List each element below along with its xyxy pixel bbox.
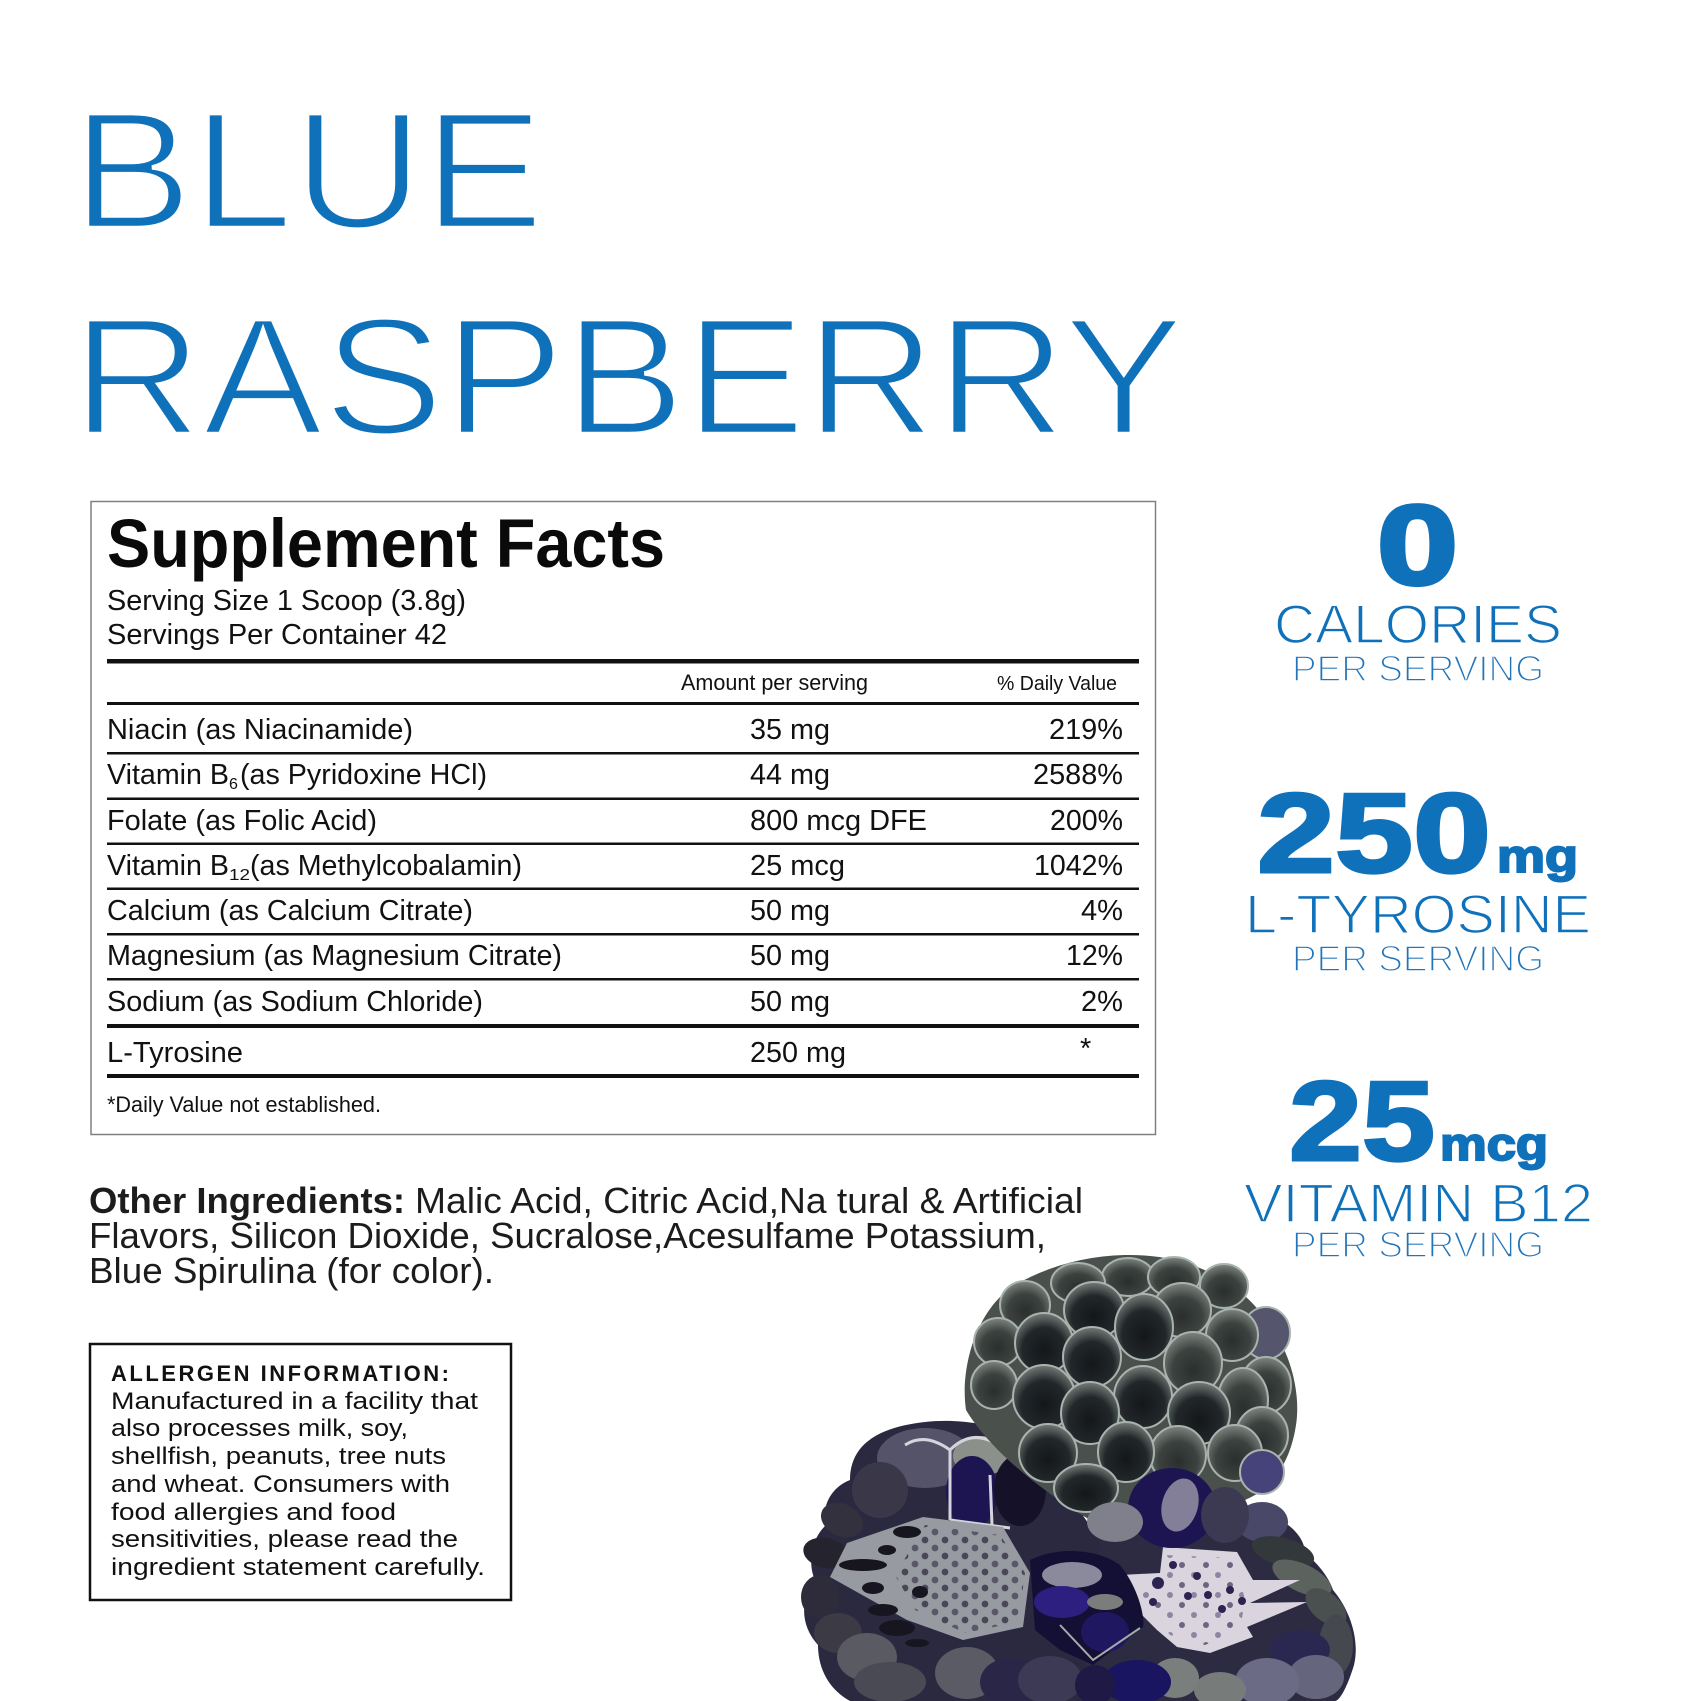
row: niacin	[107, 714, 1123, 746]
big number 25 mcg: 25	[1289, 1058, 1435, 1184]
row: vitamin b12: 25 mcg	[750, 850, 845, 882]
other ingredients: Other Ingredients:	[89, 1180, 405, 1221]
row: sodium	[107, 986, 1123, 1018]
big number 25 mcg	[1289, 1058, 1548, 1184]
serving information	[107, 585, 466, 651]
row: calcium: 4%	[1081, 895, 1123, 927]
allergen body text: food allergies and food	[111, 1499, 396, 1526]
allergen body text: and wheat. Consumers with	[111, 1471, 450, 1498]
allergen body text	[111, 1388, 485, 1581]
row: vitamin b6: 44 mg	[750, 759, 830, 791]
row: vitamin b6	[107, 759, 1123, 793]
column headers: % Daily Value	[997, 673, 1117, 695]
serving information: Serving Size 1 Scoop (3.8g)	[107, 585, 466, 617]
title: BLUE	[72, 78, 544, 264]
stat: 250 mg l-tyrosine	[1245, 770, 1591, 979]
row: calcium: Calcium (as Calcium Citrate)	[107, 895, 473, 927]
row: magnesium: 50 mg	[750, 940, 830, 972]
allergen body text: Manufactured in a facility that	[111, 1388, 478, 1415]
panel: allergen information	[90, 1344, 511, 1600]
row: vitamin b12: 12	[229, 867, 250, 884]
big number 250 mg: 250	[1257, 770, 1491, 896]
big number 0: 0	[1377, 482, 1458, 608]
overlapping purple drupelet	[1087, 1468, 1249, 1548]
column headers: Amount per serving	[681, 670, 868, 695]
illustration: blue raspberries	[800, 1255, 1356, 1701]
left cut face	[830, 1517, 1030, 1647]
row: niacin: 35 mg	[750, 714, 830, 746]
label: calories: CALORIES	[1274, 593, 1562, 655]
row: sodium: Sodium (as Sodium Chloride)	[107, 986, 483, 1018]
label: per serving: PER SERVING	[1292, 648, 1544, 689]
right berry lobes	[1103, 1502, 1353, 1701]
row: niacin: 219%	[1049, 714, 1123, 746]
row: folate: Folate (as Folic Acid)	[107, 805, 377, 837]
row: vitamin b12: Vitamin B	[107, 850, 229, 882]
other ingredients: Malic Acid, Citric Acid,Na tural & Artificial	[415, 1180, 1083, 1221]
row: l-tyrosine: *	[1080, 1033, 1091, 1065]
center dark drupelets	[1018, 1551, 1143, 1701]
row: sodium: 2%	[1081, 986, 1123, 1018]
row: folate	[107, 805, 1123, 837]
right raspberry	[1056, 1502, 1356, 1701]
left raspberry	[800, 1421, 1100, 1701]
row: vitamin b12	[107, 850, 1123, 884]
right cut face	[1120, 1547, 1307, 1653]
big number 250 mg: mg	[1497, 830, 1578, 882]
title: RASPBERRY	[72, 284, 1184, 470]
column headers	[681, 670, 1117, 695]
row: calcium: 50 mg	[750, 895, 830, 927]
serving information: Servings Per Container 42	[107, 619, 447, 651]
row: vitamin b6: 2588%	[1033, 759, 1123, 791]
allergen body text: ingredient statement carefully.	[111, 1554, 485, 1581]
allergen body text: also processes milk, soy,	[111, 1415, 408, 1442]
big number 250 mg	[1257, 770, 1578, 896]
left berry lobes	[800, 1496, 1040, 1701]
footnote: *Daily Value not established.	[107, 1092, 381, 1117]
stat: 0 calories	[1274, 482, 1562, 689]
row: folate: 800 mcg DFE	[750, 805, 927, 837]
row: vitamin b12: (as Methylcobalamin)	[250, 850, 522, 882]
other ingredients: Flavors, Silicon Dioxide, Sucralose,Acesulfame Potassium,	[89, 1215, 1046, 1256]
row: magnesium	[107, 940, 1123, 972]
row: magnesium: 12%	[1066, 940, 1123, 972]
table rules	[107, 659, 1139, 1078]
big number 25 mcg: mcg	[1440, 1118, 1548, 1170]
row: vitamin b6: Vitamin B	[107, 759, 229, 791]
row: vitamin b6: 6	[229, 776, 238, 793]
other ingredients	[89, 1180, 1083, 1291]
row: magnesium: Magnesium (as Magnesium Citrate)	[107, 940, 562, 972]
allergen body text: sensitivities, please read the	[111, 1526, 458, 1553]
label: vitamin b12: VITAMIN B12	[1244, 1172, 1593, 1234]
allergen heading: ALLERGEN INFORMATION:	[111, 1361, 449, 1386]
other ingredients: Blue Spirulina (for color).	[89, 1250, 494, 1291]
stat: 25 mcg vitamin b12	[1244, 1058, 1593, 1265]
row: l-tyrosine: 250 mg	[750, 1037, 846, 1069]
row: niacin: Niacin (as Niacinamide)	[107, 714, 413, 746]
allergen body text: shellfish, peanuts, tree nuts	[111, 1443, 446, 1470]
top raspberry	[965, 1255, 1297, 1520]
row: sodium: 50 mg	[750, 986, 830, 1018]
label: per serving: PER SERVING	[1292, 1224, 1544, 1265]
heading: supplement facts: Supplement Facts	[107, 505, 665, 582]
panel: supplement facts	[91, 502, 1156, 1134]
title	[72, 78, 1184, 470]
row: calcium	[107, 895, 1123, 927]
label: l-tyrosine: L-TYROSINE	[1245, 883, 1591, 945]
row: vitamin b12: 1042%	[1034, 850, 1123, 882]
row: l-tyrosine	[107, 1033, 1091, 1069]
row: vitamin b6: (as Pyridoxine HCl)	[240, 759, 487, 791]
label: per serving: PER SERVING	[1292, 938, 1544, 979]
row: l-tyrosine: L-Tyrosine	[107, 1037, 243, 1069]
row: folate: 200%	[1050, 805, 1123, 837]
